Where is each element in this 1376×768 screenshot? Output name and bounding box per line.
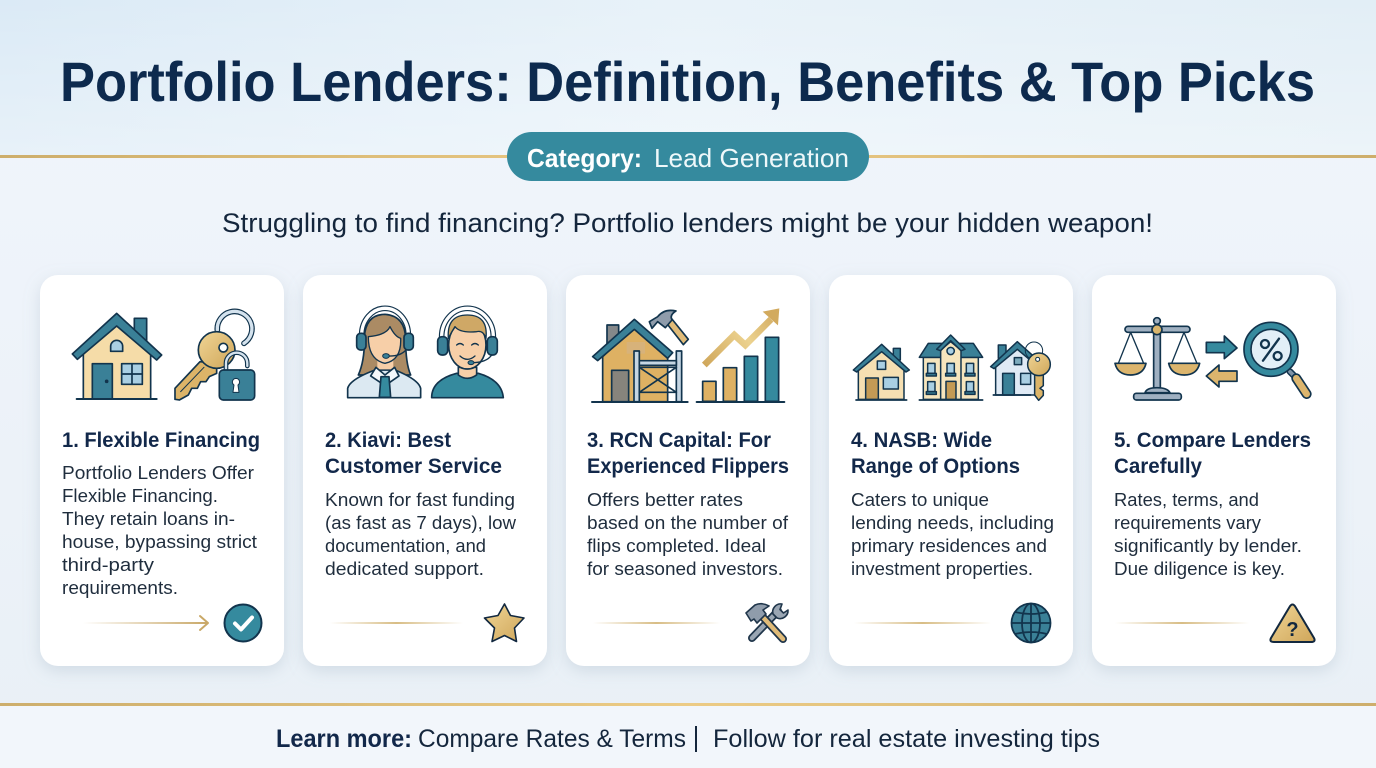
body text: Known for fast funding	[325, 489, 515, 510]
body text: Caters to unique	[851, 489, 989, 510]
category pill: Category:	[527, 143, 642, 173]
icon: globe	[1012, 604, 1050, 642]
heading	[1114, 428, 1311, 478]
heading: Range of Options	[851, 454, 1020, 478]
heading	[325, 428, 502, 478]
body text: lending needs, including	[851, 512, 1054, 533]
body text: dedicated support.	[325, 558, 484, 579]
body text: for seasoned investors.	[587, 558, 783, 579]
body text: documentation, and	[325, 535, 486, 556]
footer: Compare Rates & Terms	[418, 725, 686, 753]
heading: 3. RCN Capital: For	[587, 428, 772, 452]
body text: (as fast as 7 days), low	[325, 512, 517, 533]
heading	[587, 428, 789, 478]
icon: warning triangle with question mark	[1270, 604, 1315, 642]
heading: Carefully	[1114, 454, 1202, 478]
category pill	[507, 132, 869, 181]
body text: primary residences and	[851, 535, 1047, 556]
body text: Portfolio Lenders Offer	[62, 462, 254, 483]
icon: house and key with padlock	[72, 311, 255, 400]
body text: Flexible Financing.	[62, 485, 218, 506]
body text: flips completed. Ideal	[587, 535, 766, 556]
icon: three houses and key	[853, 335, 1050, 400]
body text: house, bypassing strict	[62, 531, 257, 552]
footer	[276, 725, 1100, 753]
body text	[587, 489, 789, 579]
body text: They retain loans in-	[62, 508, 235, 529]
category pill: Lead Generation	[654, 143, 849, 173]
body text	[62, 462, 257, 598]
panel: card 1 flexible financing	[40, 275, 284, 666]
icon: warning triangle with question mark: ?	[1286, 619, 1299, 641]
icon: star	[484, 604, 524, 642]
icon: hammer and wrench	[746, 604, 788, 639]
body text: based on the number of	[587, 512, 789, 533]
body text	[325, 489, 517, 579]
icon: support agents	[348, 308, 503, 398]
footer: Learn more:	[276, 725, 412, 753]
body text: requirements.	[62, 577, 178, 598]
panel: card 5 compare lenders	[1092, 275, 1336, 666]
body text: significantly by lender.	[1114, 535, 1302, 556]
panel: card 2 kiavi	[303, 275, 547, 666]
body text: investment properties.	[851, 558, 1033, 579]
tagline: Struggling to find financing? Portfolio lenders might be your hidden weapon!	[222, 208, 1153, 238]
heading: 1. Flexible Financing	[62, 428, 260, 452]
title: Portfolio Lenders: Definition, Benefits & Top Picks	[60, 50, 1315, 113]
icon: check badge	[224, 604, 262, 642]
heading: Customer Service	[325, 454, 502, 478]
body text: Due diligence is key.	[1114, 558, 1285, 579]
heading: 5. Compare Lenders	[1114, 428, 1311, 452]
body text: Rates, terms, and	[1114, 489, 1259, 510]
heading: Experienced Flippers	[587, 454, 789, 478]
heading: 2. Kiavi: Best	[325, 428, 451, 452]
body text: third-party	[62, 554, 155, 575]
icon: scale, arrows, magnifier with percent	[1115, 318, 1307, 400]
body text	[851, 489, 1054, 579]
body text: requirements vary	[1114, 512, 1262, 533]
heading: 4. NASB: Wide	[851, 428, 992, 452]
panel: card 4 nasb	[829, 275, 1073, 666]
body text	[1114, 489, 1302, 579]
footer: Follow for real estate investing tips	[713, 725, 1100, 753]
body text: Offers better rates	[587, 489, 743, 510]
panel: card 3 rcn capital	[566, 275, 810, 666]
icon: house under renovation and growth chart	[592, 308, 784, 402]
heading	[851, 428, 1020, 478]
arrow	[83, 616, 208, 630]
